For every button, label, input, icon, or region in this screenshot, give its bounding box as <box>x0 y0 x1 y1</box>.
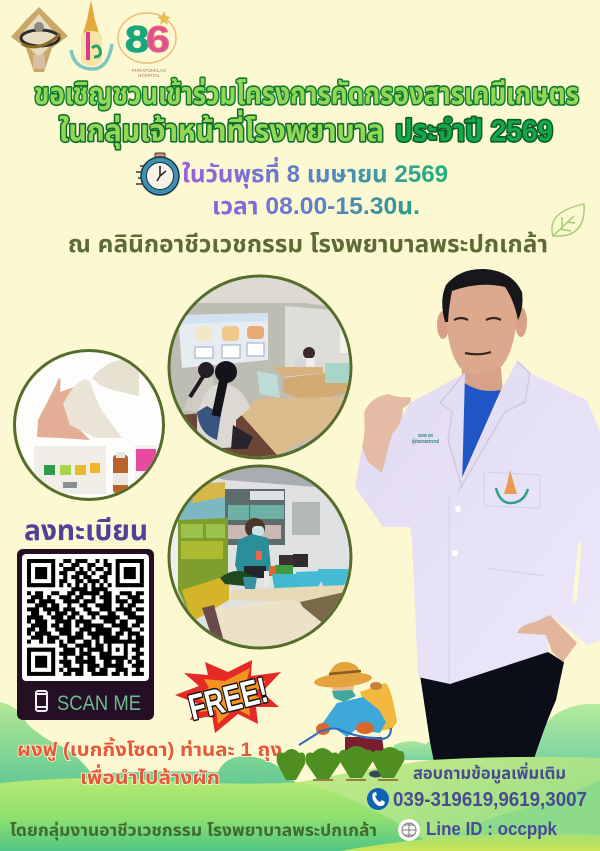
coat lapels <box>440 361 530 492</box>
icon: smartphone <box>36 691 47 711</box>
hand in pocket <box>517 615 577 662</box>
coat placket and pockets <box>449 472 545 682</box>
giveaway text <box>17 737 282 789</box>
photo: seminar room <box>165 274 355 462</box>
phone numbers: 039-319619,9619,3007 <box>393 789 587 811</box>
logo: 86 anniversary: HOSPITAL <box>138 73 160 78</box>
icon: stopwatch <box>136 153 179 195</box>
back-middle hill <box>394 736 487 760</box>
hills <box>0 702 600 800</box>
line id: Line ID : occppk <box>426 819 558 839</box>
farmer spraying crops <box>277 662 404 780</box>
fist <box>362 394 411 473</box>
back-left hill <box>0 702 310 800</box>
face mask <box>332 690 356 702</box>
organiser credit: โดยกลุ่มงานอาชีวเวชกรรม โรงพยาบาลพระปกเกล้า <box>10 820 377 841</box>
face features <box>454 318 501 354</box>
event date: ในวันพุธที่ 8 เมษายน 2569 <box>182 157 448 189</box>
logo: hospital crest <box>71 0 112 69</box>
inquiry heading: สอบถามข้อมูลเพิ่มเติม <box>413 762 566 784</box>
sprayer tank <box>360 683 397 731</box>
tank cap <box>370 682 382 690</box>
logo: 86 anniversary: PHRAPOKKLAO <box>132 68 167 73</box>
scan me label: SCAN ME <box>57 692 141 715</box>
blue shirt <box>458 382 501 478</box>
bottom lime band <box>340 833 600 851</box>
trousers <box>345 737 384 762</box>
giveaway line 1: ผงฟู (เบกกิ้งโซดา) ท่านละ 1 ถุง <box>17 737 282 761</box>
coat buttons <box>452 506 461 556</box>
man in lab coat <box>355 269 600 762</box>
event location: ณ คลินิกอาชีวเวชกรรม โรงพยาบาลพระปกเกล้า <box>68 230 548 258</box>
logo: 86 anniversary: 8 <box>125 19 149 60</box>
gloves <box>316 722 374 735</box>
head <box>447 277 517 374</box>
right rise <box>430 780 600 851</box>
hat <box>314 662 372 690</box>
icon: phone <box>367 788 389 810</box>
register heading: ลงทะเบียน <box>24 515 148 546</box>
logo: 86 anniversary <box>118 11 176 78</box>
neck <box>460 355 503 394</box>
hair <box>442 269 522 322</box>
mid band <box>300 757 600 851</box>
photo: vegetable washing station <box>165 462 355 655</box>
title <box>34 78 579 149</box>
shirt and arms <box>322 697 386 737</box>
boot <box>369 770 383 778</box>
logo: 86 anniversary: 6 <box>146 19 170 60</box>
contact block <box>367 762 587 841</box>
trousers <box>420 652 564 762</box>
back-right hill <box>533 704 600 760</box>
name embroidery: สมชาย ชุดา <box>418 433 433 439</box>
photo: pesticide test kit <box>13 349 165 501</box>
head <box>332 675 354 697</box>
QR code <box>27 561 144 674</box>
name embroidery <box>412 433 439 445</box>
free burst badge: FREE! <box>184 669 272 728</box>
logo: diamond emblem <box>11 7 68 72</box>
foreground hills <box>0 757 600 851</box>
name embroidery: ผู้ช่วยศาสตราจารย์ <box>412 437 439 445</box>
event time: เวลา 08.00-15.30น. <box>212 193 420 220</box>
lab coat <box>355 361 600 684</box>
coat crest <box>496 470 528 503</box>
QR card <box>17 549 154 720</box>
title line 2: ในกลุ่มเจ้าหน้าที่โรงพยาบาล <box>59 109 384 149</box>
logos <box>11 0 176 78</box>
spray wand and hose <box>299 728 391 745</box>
ears <box>437 307 527 339</box>
plants <box>277 746 404 780</box>
icon: globe <box>398 819 420 841</box>
icon: leaf <box>552 204 584 236</box>
title year: ประจำปี 2569 <box>395 115 553 148</box>
giveaway line 2: เพื่อนำไปล้างผัก <box>80 764 220 789</box>
front hill <box>0 778 440 851</box>
background gap by right sleeve <box>572 540 582 605</box>
